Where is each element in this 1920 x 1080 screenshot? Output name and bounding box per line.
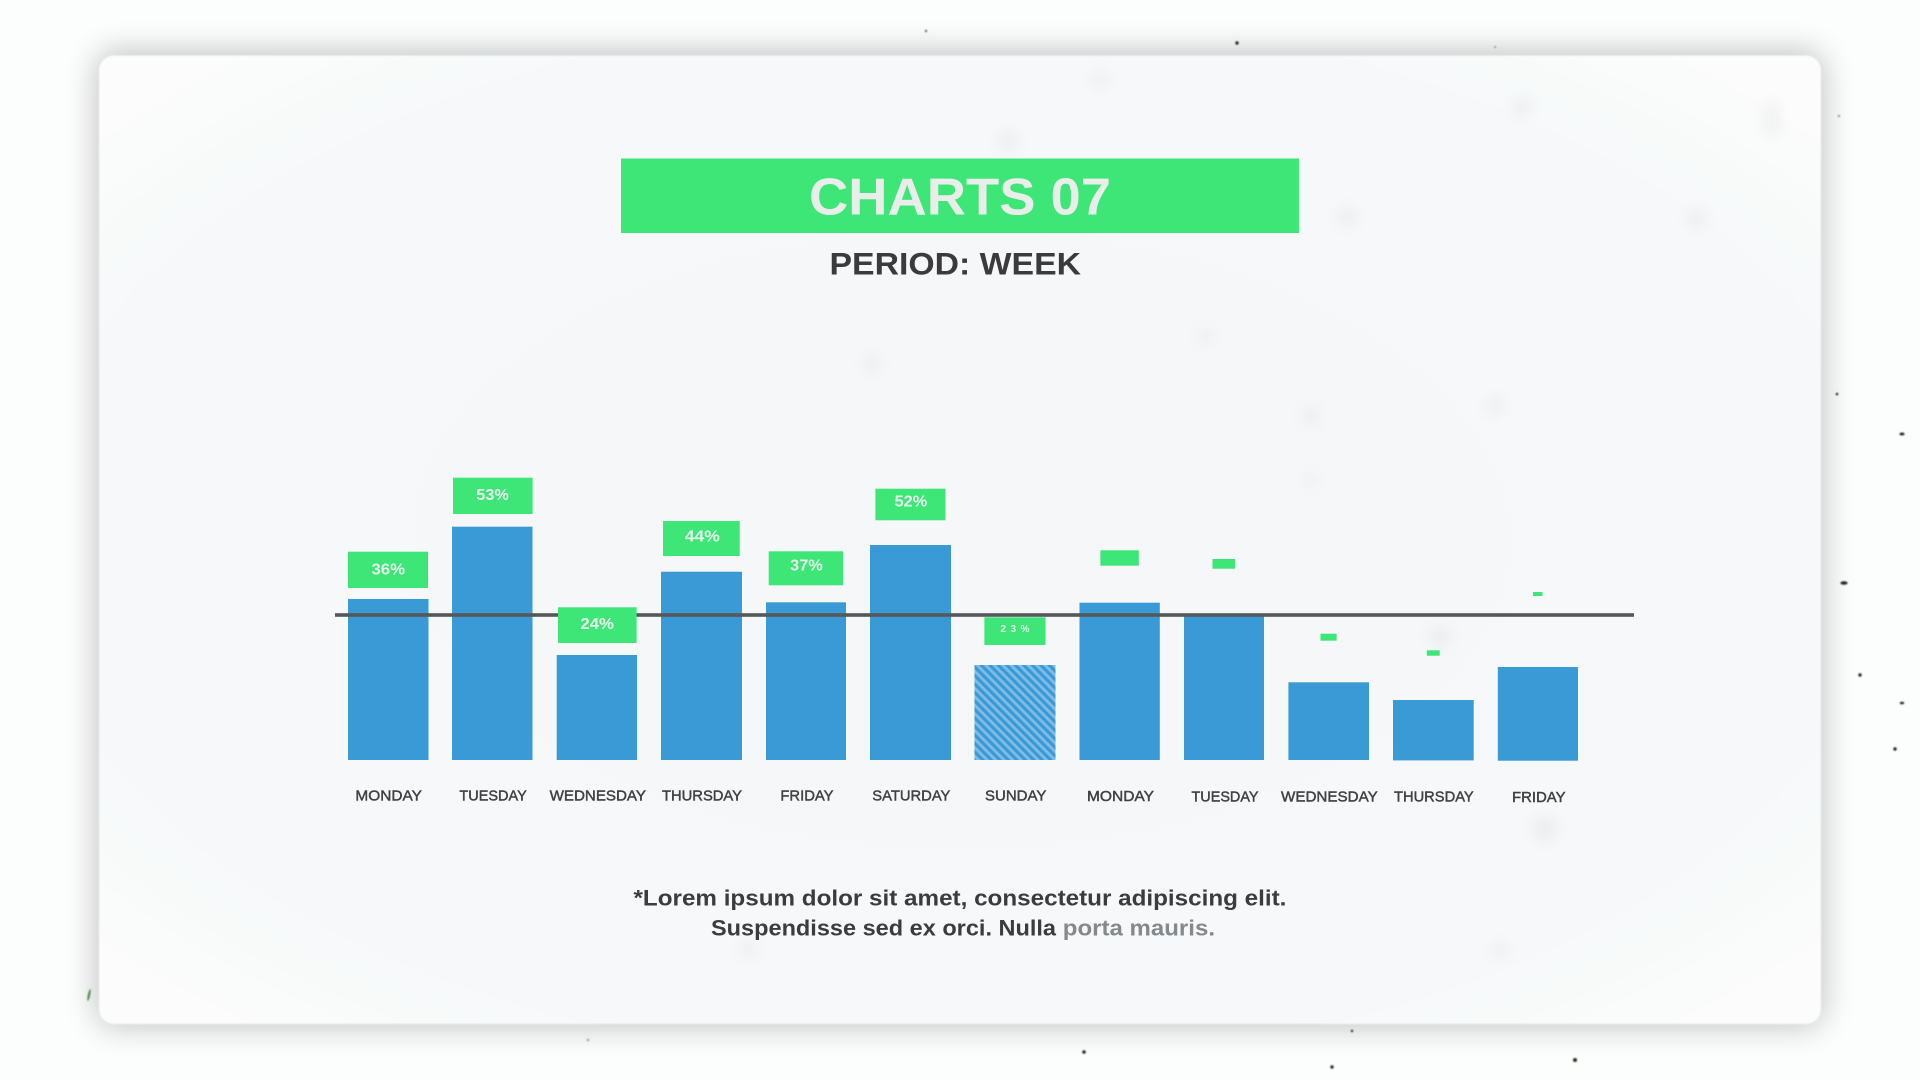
value labels	[372, 487, 1029, 635]
average line	[335, 613, 1634, 617]
day labels: WEDNESDAY	[550, 788, 646, 805]
value labels: 36%	[372, 562, 405, 578]
day labels	[355, 788, 1566, 806]
value labels: 24%	[580, 616, 614, 633]
day labels: THURSDAY	[1394, 789, 1474, 806]
day labels: THURSDAY	[662, 788, 742, 805]
subtitle: PERIOD: WEEK	[830, 246, 1081, 282]
day labels: FRIDAY	[780, 788, 834, 805]
day labels: FRIDAY	[1512, 789, 1566, 806]
day labels: TUESDAY	[1192, 788, 1258, 805]
bar chart	[335, 478, 1634, 806]
value labels: 52%	[895, 494, 927, 511]
value chips	[348, 478, 1542, 656]
day labels: MONDAY	[1087, 788, 1154, 805]
footnote: Suspendisse sed ex orci. Nulla	[711, 916, 1057, 941]
title banner: CHARTS 07	[809, 168, 1111, 226]
bars	[348, 527, 1578, 761]
value labels: 53%	[476, 487, 509, 504]
value labels: 37%	[790, 558, 823, 575]
value labels: 44%	[685, 529, 720, 546]
title banner	[621, 158, 1299, 233]
day labels: SUNDAY	[985, 788, 1046, 805]
day labels: WEDNESDAY	[1281, 789, 1378, 806]
footnote	[634, 885, 1286, 941]
value labels: 23%	[1000, 624, 1029, 635]
day labels: MONDAY	[355, 788, 422, 805]
day labels: SATURDAY	[872, 788, 950, 805]
footnote: porta mauris.	[1063, 916, 1215, 941]
day labels: TUESDAY	[459, 788, 527, 805]
footnote: *Lorem ipsum dolor sit amet, consectetur adipiscing elit.	[634, 885, 1286, 910]
